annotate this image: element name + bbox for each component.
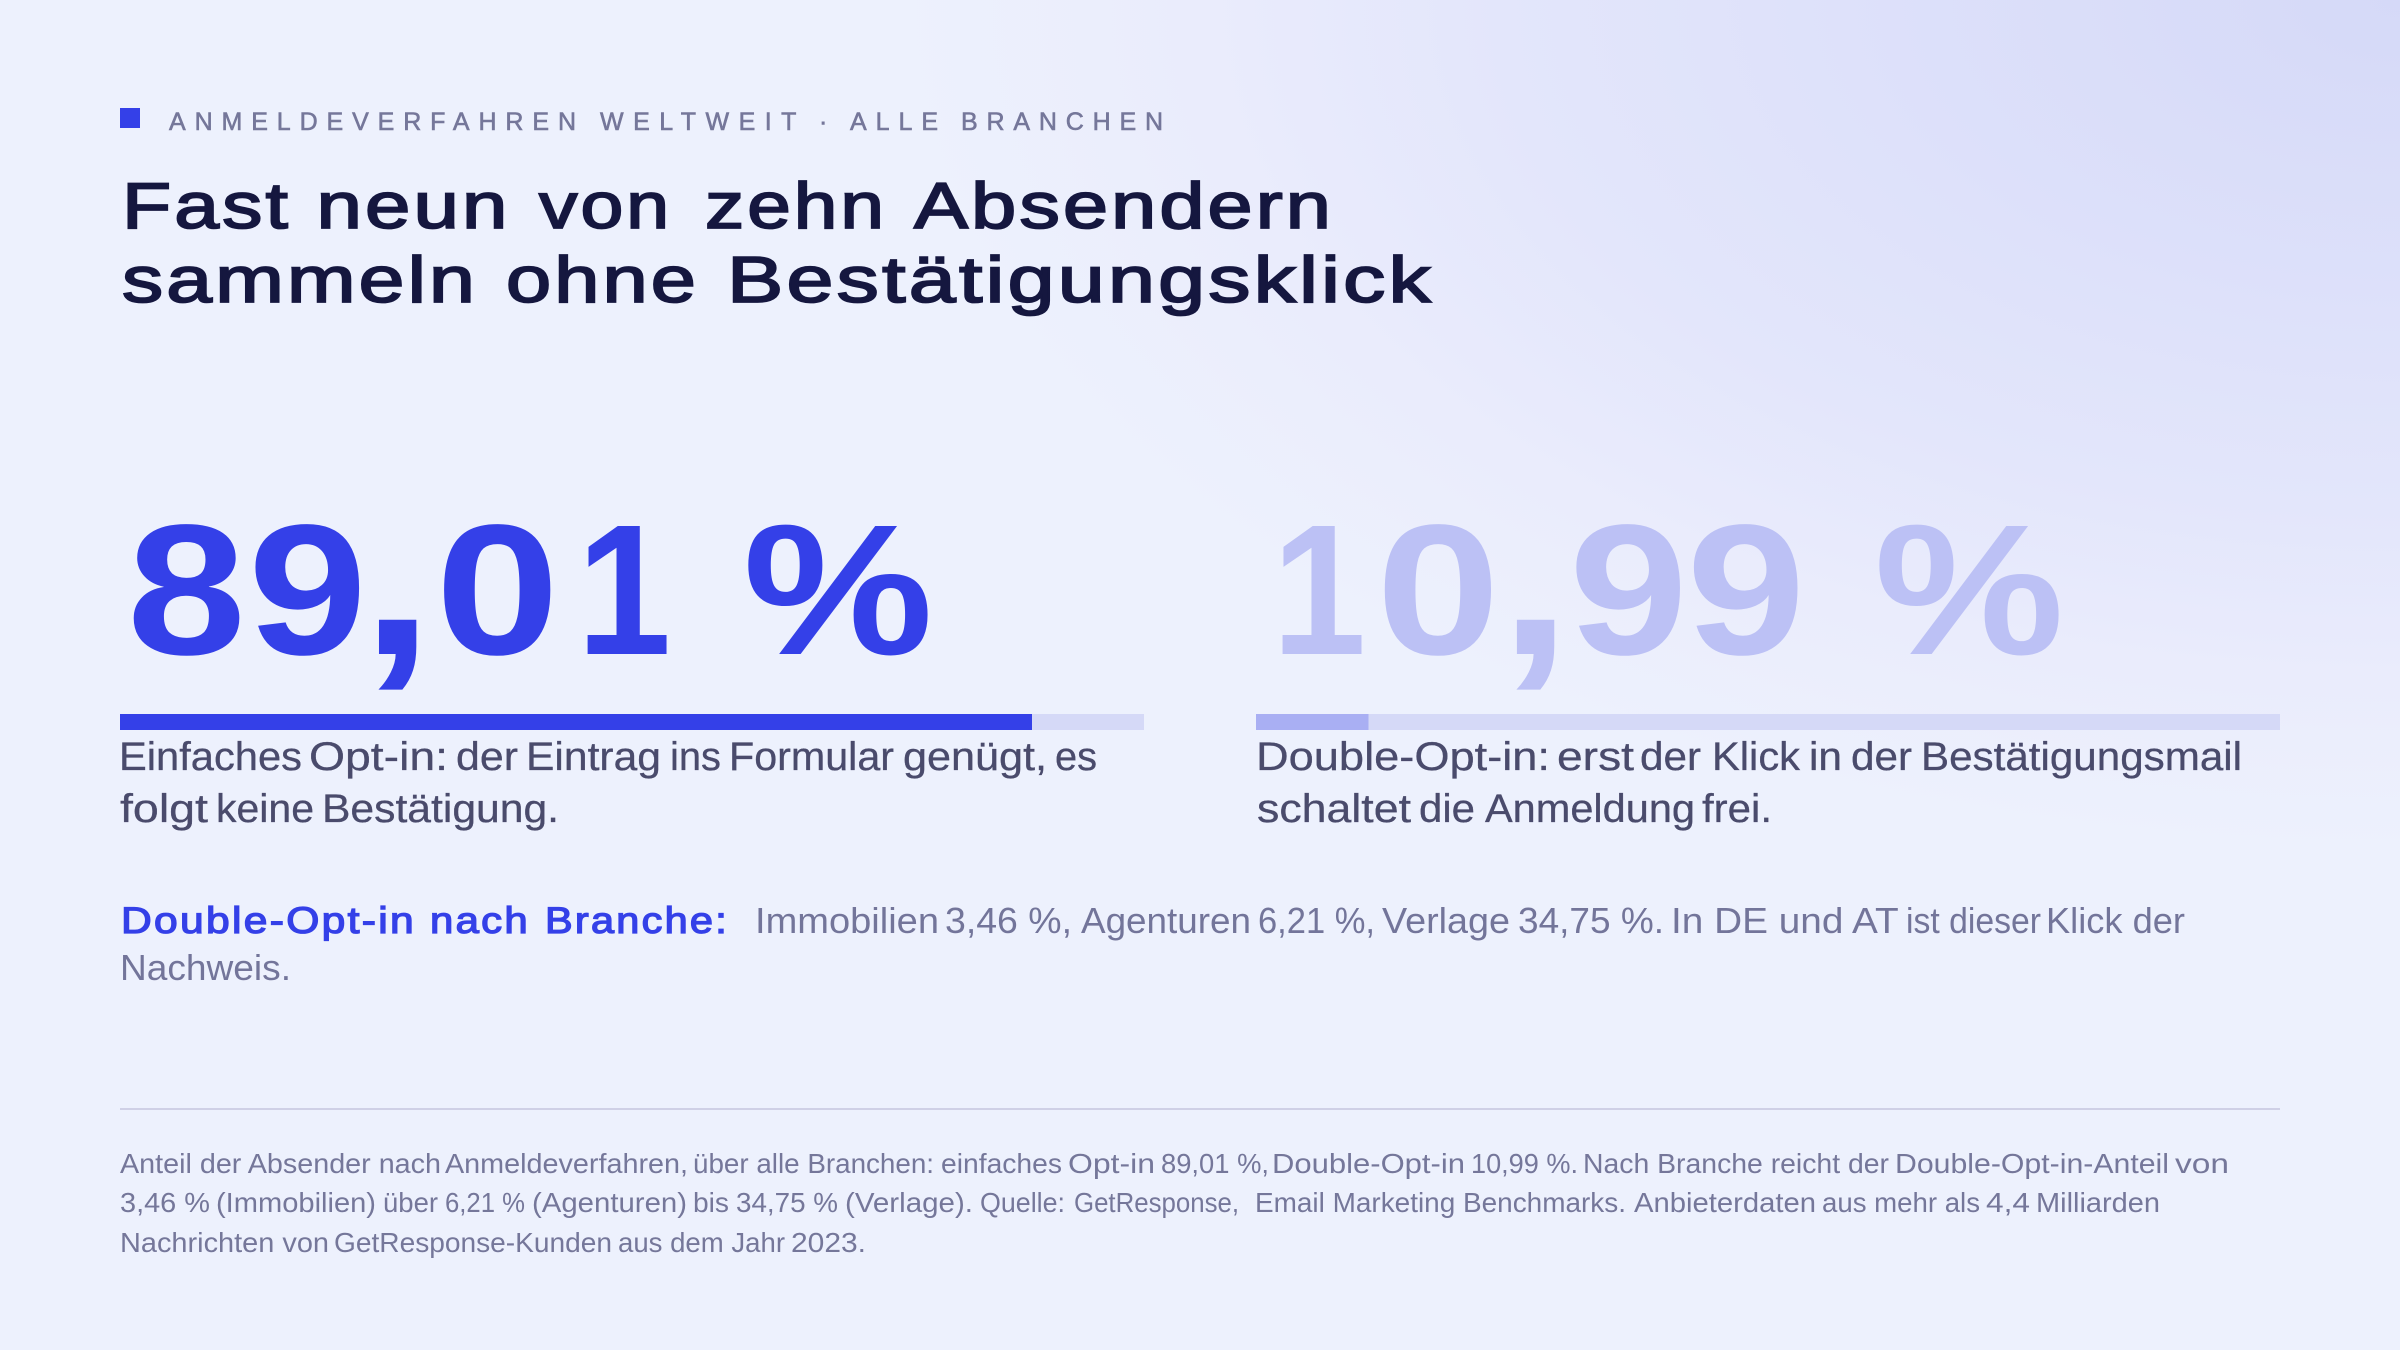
big number 10,99 %: 1 (1272, 487, 1366, 694)
branch values: 3,46 %, (945, 900, 1072, 941)
branch values: 34,75 %. (1518, 900, 1664, 941)
footnote: Double-Opt-in (1272, 1148, 1465, 1179)
branch values: ist dieser (1906, 900, 2041, 941)
footnote (120, 1148, 2229, 1258)
title: neun (316, 169, 510, 242)
branch values: Klick der (2046, 900, 2185, 941)
description: Opt-in: (309, 735, 448, 779)
title: Fast (122, 169, 291, 242)
title: Absendern (914, 169, 1334, 242)
description: frei. (1702, 787, 1772, 831)
footnote: Opt-in (1068, 1148, 1155, 1179)
description: die (1419, 787, 1475, 831)
description: erst (1557, 735, 1634, 779)
big number 10,99 %: 9 (1686, 487, 1805, 694)
big number 89,01 %: , (361, 446, 434, 703)
big number 10,99 %: 9 (1569, 487, 1688, 694)
big number 89,01 %: 8 (127, 487, 246, 694)
big number 89,01 %: 1 (577, 487, 671, 694)
description: ins (670, 735, 721, 779)
description: Eintrag (526, 735, 661, 779)
description: der (456, 735, 518, 779)
branch values: 6,21 %, (1258, 900, 1375, 941)
big number 10,99 %: 0 (1376, 487, 1500, 694)
progress bar 10,99 % (1256, 714, 2280, 730)
branch values: Verlage (1382, 900, 1510, 941)
progress bar 89,01 % (120, 714, 1144, 730)
footnote: 34,75 % (736, 1187, 838, 1218)
footnote: Anbieterdaten (1634, 1187, 1816, 1218)
description: Anmeldung (1485, 787, 1695, 831)
eyebrow text: WELTWEIT (600, 108, 796, 136)
icon: blue square marker (120, 108, 140, 128)
branch label: Branche: (545, 900, 729, 941)
footnote: GetResponse-Kunden (334, 1227, 612, 1258)
title: von (539, 169, 672, 242)
footnote: über (383, 1187, 438, 1218)
big number 89,01 %: 0 (435, 487, 559, 694)
footnote: 4,4 (1986, 1187, 2030, 1218)
description: in (1809, 735, 1842, 779)
description: es (1055, 735, 1097, 779)
panel: Double-Opt-in (1256, 446, 2280, 831)
text block: Double-Opt-in nach Branche (120, 900, 2185, 988)
big number 89,01 %: % (743, 487, 933, 694)
footnote: 3,46 % (120, 1187, 210, 1218)
footnote: über alle Branchen: (693, 1148, 934, 1179)
branch values: Nachweis. (120, 947, 291, 988)
eyebrow text: ALLE (850, 108, 938, 136)
description: Klick (1712, 735, 1801, 779)
big number 10,99 %: % (1874, 487, 2064, 694)
branch values: Agenturen (1081, 900, 1251, 941)
footnote: 6,21 % (445, 1187, 525, 1218)
footnote: 89,01 %, (1161, 1148, 1269, 1179)
title: Bestätigungsklick (727, 243, 1434, 316)
footnote: GetResponse, (1074, 1187, 1239, 1218)
branch values (120, 900, 2185, 988)
eyebrow marker and label (120, 108, 1163, 136)
big number 10,99 %: , (1498, 446, 1572, 703)
footnote: aus dem Jahr (618, 1227, 785, 1258)
eyebrow text: BRANCHEN (961, 108, 1163, 136)
title (122, 169, 1434, 316)
footnote: (Agenturen) (532, 1187, 687, 1218)
footnote: Quelle: (980, 1187, 1065, 1218)
footnote: Double-Opt-in-Anteil (1895, 1148, 2169, 1179)
description: Formular (729, 735, 894, 779)
big number 89,01 %: 9 (248, 487, 367, 694)
footnote: 10,99 %. (1471, 1148, 1578, 1179)
footnote: (Immobilien) (216, 1187, 376, 1218)
footnote: Nachrichten von (120, 1227, 329, 1258)
branch values: Immobilien (755, 900, 939, 941)
footnote: Nach Branche reicht der (1583, 1148, 1889, 1179)
description: schaltet (1257, 787, 1411, 831)
footnote: Anmeldeverfahren, (445, 1148, 688, 1179)
footnote: aus mehr als (1822, 1187, 1980, 1218)
footnote: von (2175, 1148, 2229, 1179)
branch label: Double-Opt-in (121, 900, 416, 941)
description: Bestätigungsmail (1921, 735, 2242, 779)
footnote: einfaches (941, 1148, 1062, 1179)
description (119, 735, 1097, 831)
panel: einfaches Opt-in (119, 446, 1144, 831)
eyebrow text: · (819, 108, 827, 136)
branch label: nach (430, 900, 530, 941)
title: ohne (506, 243, 699, 316)
description: Einfaches (119, 735, 302, 779)
description: der (1851, 735, 1912, 779)
footnote: Milliarden (2036, 1187, 2160, 1218)
description: Double-Opt-in: (1256, 735, 1550, 779)
footnote: Anteil der Absender nach (120, 1148, 441, 1179)
footnote: (Verlage). (845, 1187, 973, 1218)
footnote: bis (693, 1187, 729, 1218)
description: folgt (120, 787, 208, 831)
description: genügt, (903, 735, 1047, 779)
description: keine (216, 787, 314, 831)
title: sammeln (122, 243, 478, 316)
title: zehn (705, 169, 887, 242)
description (1256, 735, 2242, 831)
branch values: In DE und AT (1671, 900, 1899, 941)
description: der (1640, 735, 1701, 779)
footnote: Email Marketing Benchmarks. (1255, 1187, 1626, 1218)
description: Bestätigung. (322, 787, 559, 831)
eyebrow text: ANMELDEVERFAHREN (169, 108, 576, 136)
footnote: 2023. (791, 1227, 866, 1258)
